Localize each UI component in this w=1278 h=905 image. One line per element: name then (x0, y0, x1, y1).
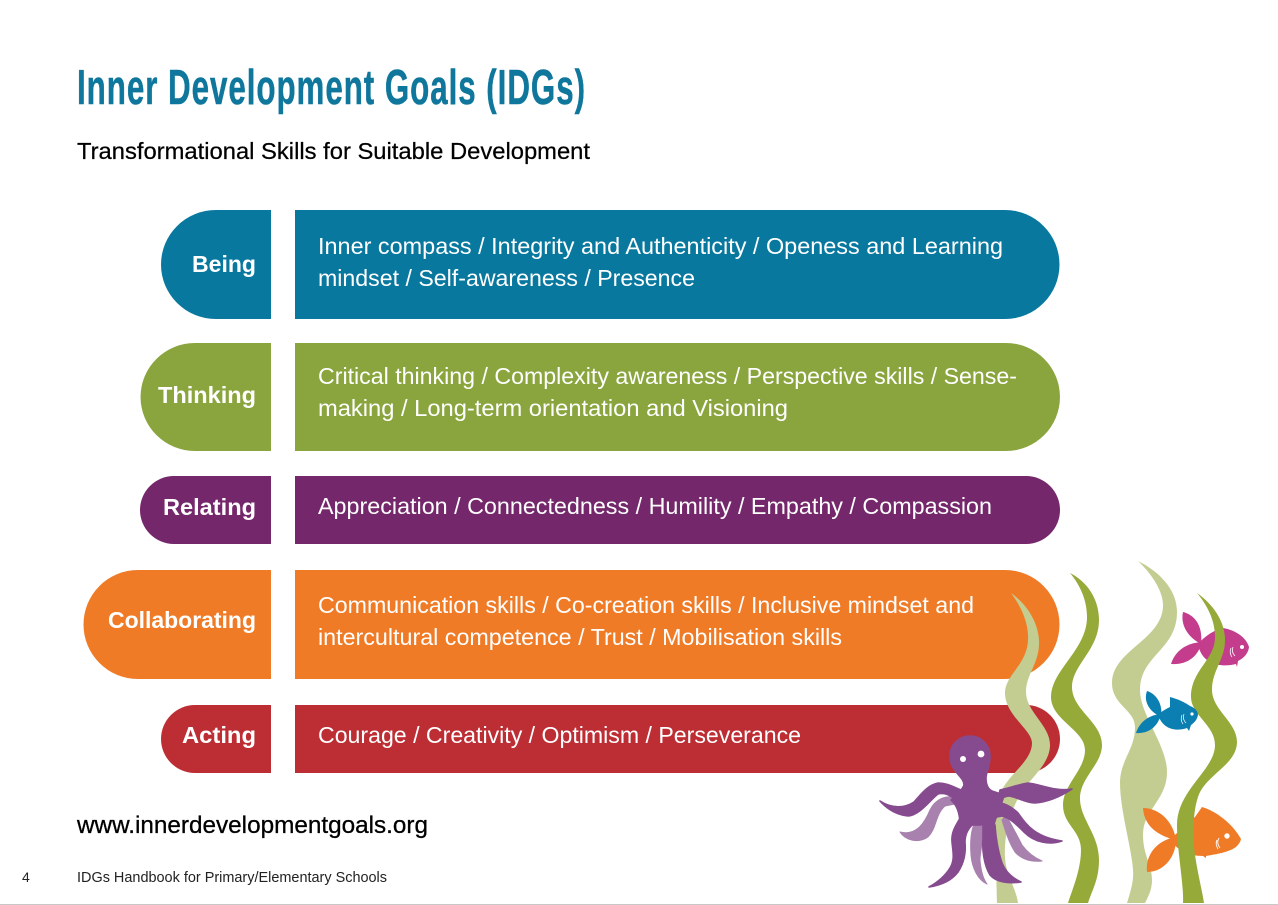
row: Acting (161, 705, 1060, 773)
label pill: Collaborating: Collaborating (108, 607, 256, 633)
label pill: Collaborating (83, 570, 271, 679)
title: Inner Development Goals (IDGs) (77, 61, 586, 115)
content bar: Collaborating: intercultural competence / Trust / Mobilisation skills (318, 624, 842, 650)
seaweed: dark left (1051, 573, 1102, 903)
octopus: head and body (950, 736, 1004, 825)
seaweed: light front (995, 593, 1050, 903)
octopus (880, 736, 1072, 887)
illustration: seaweed, fish and octopus (880, 561, 1249, 903)
label pill: Relating (140, 476, 271, 544)
content bar: Acting: Courage / Creativity / Optimism / Perseverance (318, 722, 801, 748)
label pill: Being (161, 210, 271, 319)
footer text: IDGs Handbook for Primary/Elementary Schools (77, 869, 387, 886)
footer line (0, 904, 1278, 905)
subtitle: Transformational Skills for Suitable Development (77, 138, 591, 164)
row: Being (161, 210, 1059, 319)
page number: 4 (22, 869, 30, 885)
content bar: Thinking (295, 343, 1060, 451)
label pill: Thinking: Thinking (158, 382, 256, 408)
fish: orange (1143, 807, 1241, 872)
label pill: Relating: Relating (163, 494, 256, 520)
website url: www.innerdevelopmentgoals.org (76, 812, 428, 839)
content bar: Thinking: Critical thinking / Complexity awareness / Perspective skills / Sense- (318, 363, 1017, 389)
content bar: Relating: Appreciation / Connectedness / Humility / Empathy / Compassion (318, 493, 992, 519)
octopus: back tentacles (900, 797, 1042, 884)
octopus: arm lower centre (983, 820, 1021, 883)
content bar: Relating (295, 476, 1060, 544)
label pill: Acting: Acting (182, 722, 256, 748)
row: Collaborating (83, 570, 1059, 679)
fish: pink (1171, 612, 1249, 667)
content bar: Being (295, 210, 1060, 319)
octopus: eyes (960, 751, 984, 762)
seaweed: dark right (1177, 593, 1237, 903)
content bar: Thinking: making / Long-term orientation and Visioning (318, 395, 788, 421)
octopus: arm upper left (880, 783, 966, 816)
content bar: Collaborating: Communication skills / Co-creation skills / Inclusive mindset and (318, 592, 974, 618)
row: Thinking (141, 343, 1060, 451)
content bar: Collaborating (295, 570, 1060, 679)
content bar: Acting (295, 705, 1060, 773)
row: Relating (140, 476, 1060, 544)
content bar: Being: Inner compass / Integrity and Authenticity / Openess and Learning (318, 233, 1003, 259)
label pill: Thinking (141, 343, 271, 451)
octopus: arm upper right (998, 783, 1072, 803)
label pill: Being: Being (192, 251, 256, 277)
octopus: arm lower right (992, 802, 1062, 843)
octopus: arm lower left (929, 815, 976, 887)
fish: blue (1136, 691, 1198, 733)
content bar: Being: mindset / Self-awareness / Presence (318, 265, 695, 291)
label pill: Acting (161, 705, 271, 773)
seaweed: light middle (1112, 561, 1177, 903)
